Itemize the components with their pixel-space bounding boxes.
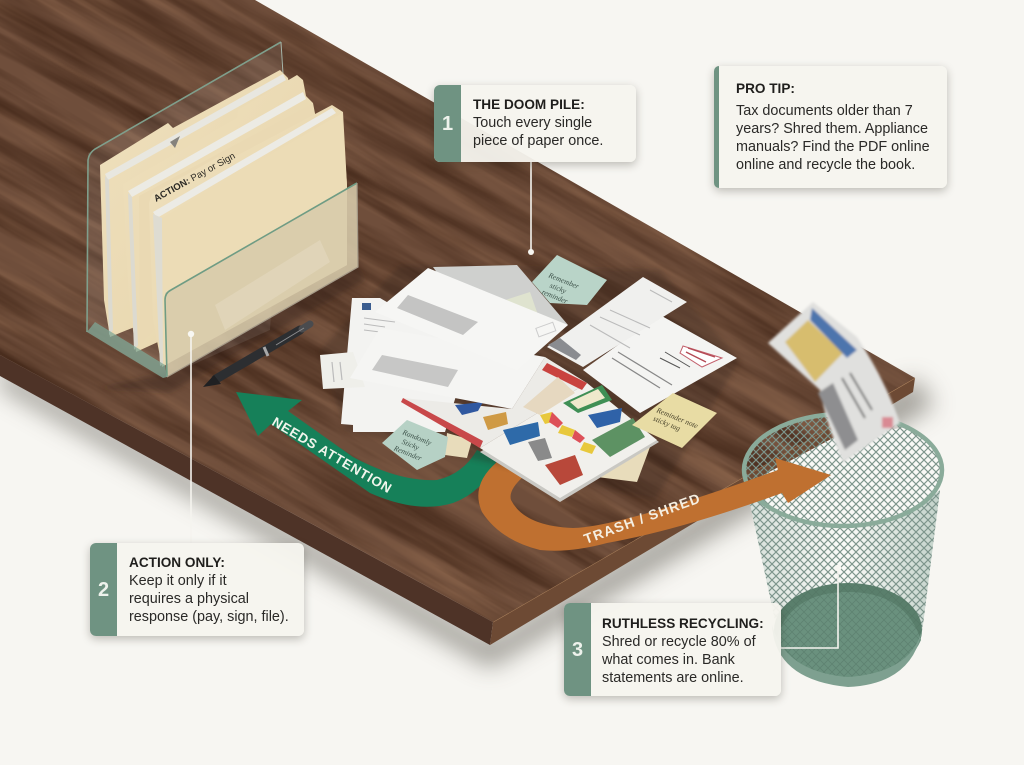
pro tip text: years? Shred them. Appliance <box>736 121 928 137</box>
callout 1: the doom pile <box>434 85 636 162</box>
basket body <box>747 490 940 677</box>
sticky note: top <box>532 255 607 308</box>
sticky note: lower: Sticky <box>401 437 421 452</box>
pro tip text <box>736 81 930 173</box>
step number 2 <box>90 543 117 636</box>
basket interior <box>746 417 940 524</box>
folder tab label: ACTION: Pay or Sign <box>152 151 237 205</box>
sticky note: lower: Randomly <box>401 428 433 447</box>
arrow: trash / shred <box>478 458 831 551</box>
callout 3 text: RUTHLESS RECYCLING: <box>602 616 764 631</box>
file organizer with folders <box>87 42 365 392</box>
sticky note: top: Remember <box>547 271 580 291</box>
glass front panel <box>165 183 358 377</box>
small check <box>490 292 538 315</box>
window envelope lower <box>350 328 545 409</box>
callout 1 text <box>473 97 603 149</box>
callout 2: action only <box>90 543 304 636</box>
small left receipt <box>320 352 365 389</box>
sticky note: top: reminder <box>541 287 569 306</box>
pen <box>203 324 310 387</box>
step number 1: 1 <box>442 112 453 134</box>
flyer magazine <box>401 357 659 502</box>
callout 2 text: requires a physical <box>129 591 249 607</box>
sticky note: top: sticky <box>549 281 568 296</box>
arrow: needs attention <box>236 392 497 507</box>
waste basket <box>735 414 960 687</box>
callout 2 text: Keep it only if it <box>129 573 227 589</box>
step number 3 <box>564 603 591 696</box>
tan receipts under pile <box>445 433 650 482</box>
paper pile <box>320 255 740 502</box>
flying flyer <box>768 302 900 463</box>
window envelope upper <box>375 268 568 370</box>
callout 1 text: THE DOOM PILE: <box>473 97 585 112</box>
callout 2 text: ACTION ONLY: <box>129 555 225 570</box>
leader line 3 <box>781 565 841 648</box>
callout 1 text: Touch every single <box>473 115 592 131</box>
arrow label: TRASH / SHRED <box>582 490 703 547</box>
callout 1 text: piece of paper once. <box>473 133 603 149</box>
callout 2 text <box>129 555 289 625</box>
long receipt <box>547 277 687 367</box>
sticky note: lower <box>382 420 448 470</box>
callout: pro tip <box>714 66 947 188</box>
pro tip text: Tax documents older than 7 <box>736 103 913 119</box>
back folder <box>100 70 296 337</box>
sticky note: yellow: Reminder note <box>655 406 699 430</box>
sticky note: lower: Reminder <box>392 443 423 463</box>
step number 3: 3 <box>572 638 583 660</box>
leader line 1 <box>528 162 534 255</box>
callout 3: ruthless recycling <box>564 603 781 696</box>
glass back panel <box>87 42 283 378</box>
step number 2: 2 <box>98 578 109 600</box>
step number 1 <box>434 85 461 162</box>
callout 3 text <box>602 616 764 686</box>
pro tip text: PRO TIP: <box>736 81 795 96</box>
middle folder <box>123 75 322 352</box>
pro tip text: online and recycle the book. <box>736 157 915 173</box>
callout 2 text: response (pay, sign, file). <box>129 609 289 625</box>
front folder <box>149 105 347 367</box>
pro tip accent bar <box>714 66 719 188</box>
desk shadow <box>0 365 935 668</box>
basket floor <box>774 583 922 677</box>
letter sheets <box>341 298 470 432</box>
leader line 2 <box>188 331 194 543</box>
callout 3 text: what comes in. Bank <box>602 652 735 668</box>
desk tabletop <box>0 0 916 645</box>
sticky note: yellow: sticky tag <box>652 414 682 433</box>
grey envelope flap <box>433 265 568 325</box>
arrow label: NEEDS ATTENTION <box>269 414 395 496</box>
callout 3 text: Shred or recycle 80% of <box>602 634 756 650</box>
sticky note: yellow <box>632 393 717 448</box>
callout 3 text: statements are online. <box>602 670 744 686</box>
pro tip text: manuals? Find the PDF online <box>736 139 930 155</box>
invoice <box>583 315 737 413</box>
